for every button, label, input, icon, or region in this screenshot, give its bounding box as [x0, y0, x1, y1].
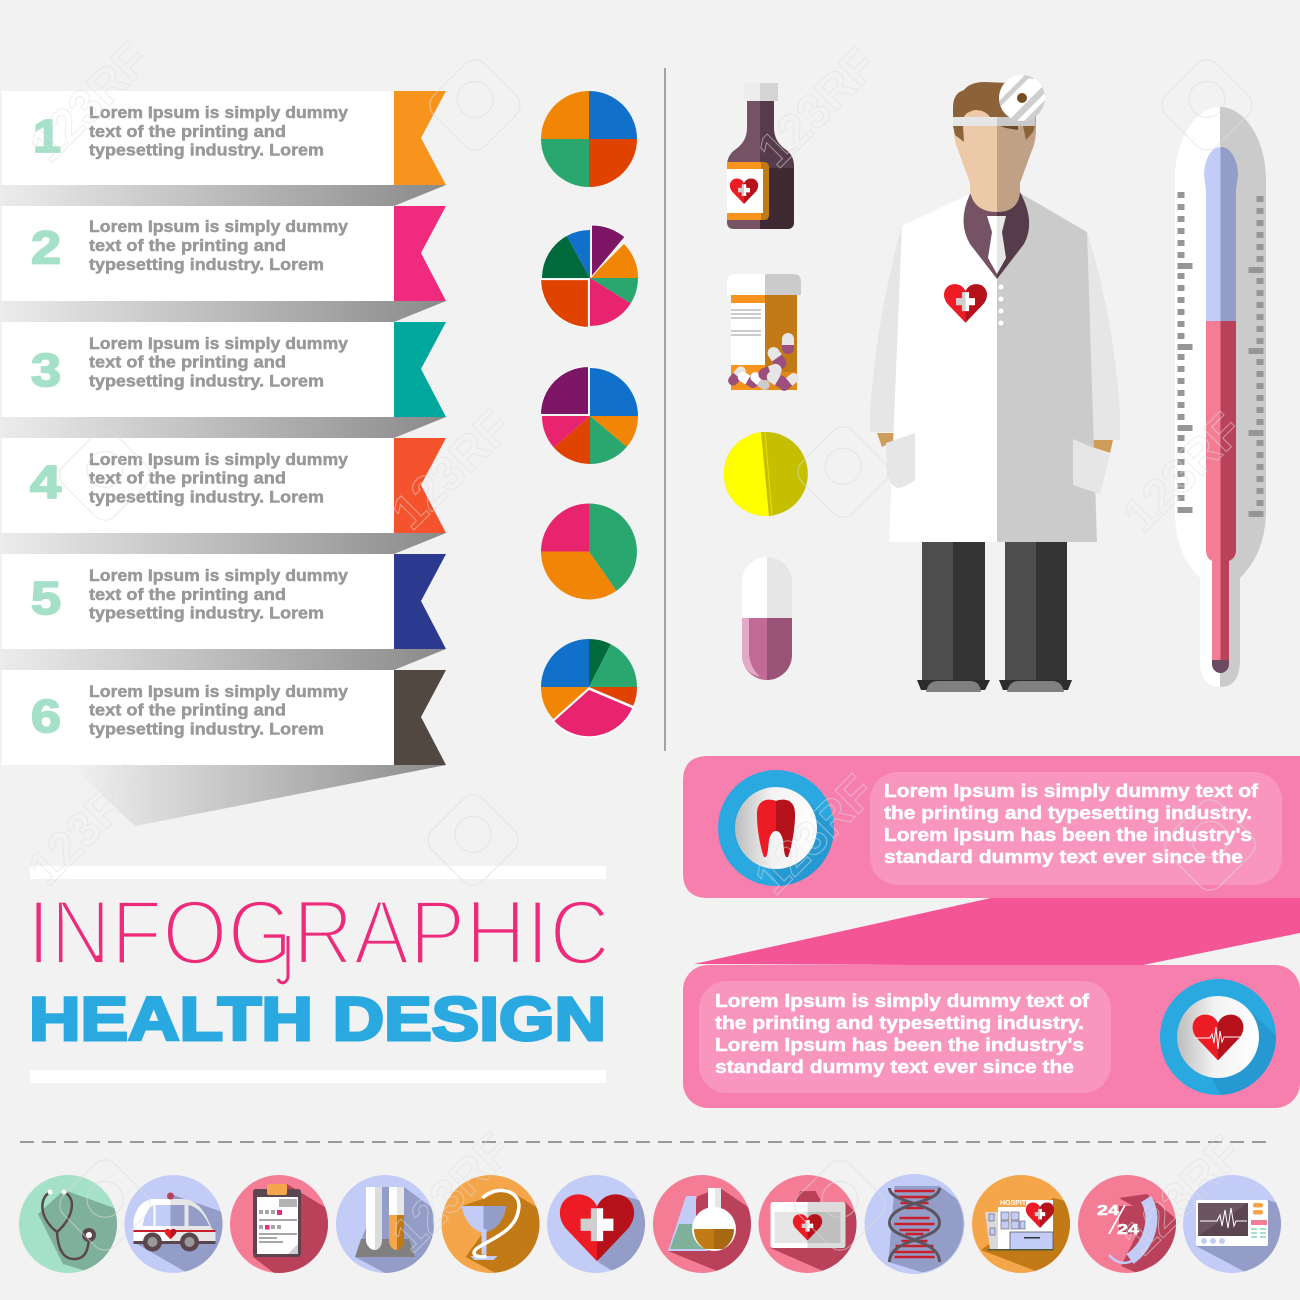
icon: heart monitor — [1183, 1175, 1281, 1273]
callout: tooth: standard dummy text ever since the — [884, 846, 1243, 867]
doctor pockets — [886, 433, 1110, 494]
list row 1 — [0, 91, 446, 206]
infographic canvas: 123RF — [18, 756, 158, 896]
pie chart 4 — [541, 504, 637, 599]
icon: 24/24 phone — [1078, 1175, 1176, 1273]
icon: hospital: HOSPITAL — [1000, 1200, 1036, 1207]
coat buttons — [998, 284, 1004, 326]
icon: hospital — [972, 1175, 1070, 1273]
divider line — [664, 68, 666, 751]
doctor legs and shoes — [917, 542, 1072, 692]
doctor head — [953, 82, 1036, 212]
icon: tooth disc — [718, 770, 834, 886]
list row 2: text of the printing and — [89, 236, 286, 255]
list row 4: typesetting industry. Lorem — [89, 488, 324, 506]
callout: heart: standard dummy text ever since the — [715, 1056, 1074, 1077]
icon: ambulance — [124, 1175, 222, 1273]
pie chart 1 — [541, 91, 637, 187]
list row 3 — [0, 322, 446, 438]
doctor coat — [889, 193, 1097, 542]
list row 4: 4 — [30, 456, 61, 508]
title block — [27, 866, 610, 1083]
icon: capsule — [742, 557, 792, 680]
callout: heart: Lorem Ipsum is simply dummy text of — [715, 990, 1090, 1011]
infographic canvas: 123RF — [382, 1123, 522, 1263]
callout: tooth: Lorem Ipsum is simply dummy text of — [884, 780, 1259, 801]
doctor sleeves — [870, 226, 1120, 453]
icon: clipboard — [230, 1175, 328, 1273]
right temperature scale — [1248, 196, 1264, 517]
icon: pharmacy bowl and snake — [442, 1175, 540, 1273]
infographic canvas: 123RF — [382, 400, 522, 540]
callout: heart — [683, 965, 1300, 1108]
list row 2: Lorem Ipsum is simply dummy — [89, 217, 349, 236]
list row 3: Lorem Ipsum is simply dummy — [89, 334, 349, 353]
title letter G tail — [278, 936, 288, 983]
dashed separator — [20, 1141, 1270, 1143]
list row 6: Lorem Ipsum is simply dummy — [89, 682, 349, 701]
infographic canvas: 123RF — [745, 765, 885, 905]
infographic canvas: 123RF — [1113, 1126, 1253, 1266]
list row 2: 2 — [31, 222, 61, 274]
list row 6: typesetting industry. Lorem — [89, 720, 324, 738]
list row 1: 1 — [33, 110, 61, 162]
icon: pill bottle — [726, 274, 801, 393]
title bottom bar — [30, 1070, 606, 1083]
callout: heart: the printing and typesetting industry. — [715, 1012, 1084, 1033]
icon: 24/24 phone: 24 — [1117, 1221, 1140, 1238]
list row 5: Lorem Ipsum is simply dummy — [89, 566, 349, 585]
list row 3: text of the printing and — [89, 352, 286, 372]
infographic canvas: 123RF — [748, 38, 888, 178]
list row 5: typesetting industry. Lorem — [89, 604, 324, 622]
panel: pink callouts — [683, 756, 1300, 1108]
list row 5: 5 — [31, 572, 61, 624]
list row 6: text of the printing and — [89, 700, 286, 720]
list row 4 — [0, 438, 446, 554]
title top bar — [30, 866, 606, 879]
list row 4: text of the printing and — [89, 468, 286, 488]
icon row — [19, 1174, 1281, 1274]
list row 2 — [0, 206, 446, 322]
icon: coat heart badge — [944, 284, 987, 323]
pie chart 5 — [541, 639, 637, 737]
icon: stethoscope — [19, 1175, 117, 1273]
icon: heart with cross — [547, 1175, 645, 1273]
icon: thermometer — [1175, 107, 1266, 687]
callout: tooth — [683, 756, 1300, 898]
icon: DNA helix — [864, 1174, 964, 1274]
callout: heart: Lorem Ipsum has been the industry's — [715, 1034, 1084, 1055]
list row 4: Lorem Ipsum is simply dummy — [89, 450, 349, 469]
icon: head mirror — [999, 75, 1045, 121]
icon: first aid kit — [758, 1175, 856, 1273]
icon: yellow tablet — [724, 432, 808, 516]
list row 1: text of the printing and — [89, 122, 286, 141]
list row 5: text of the printing and — [89, 585, 286, 604]
callout: tooth: the printing and typesetting industry. — [884, 802, 1252, 823]
infographic canvas: 123RF — [20, 33, 160, 173]
list row 3: typesetting industry. Lorem — [89, 372, 324, 390]
list row 1: typesetting industry. Lorem — [89, 140, 324, 160]
icon: test tubes — [336, 1175, 434, 1273]
title: infographic: INFOGRAPHIC — [27, 882, 610, 984]
left temperature scale — [1178, 192, 1192, 513]
list row 5 — [0, 554, 446, 670]
subtitle: health design: HEALTH DESIGN — [29, 985, 606, 1053]
list row 2: typesetting industry. Lorem — [89, 255, 324, 274]
doctor collar and tie — [964, 192, 1029, 279]
pie chart 3 — [540, 366, 638, 464]
list row 6: 6 — [31, 690, 61, 742]
infographic canvas: 123RF — [1113, 403, 1253, 543]
icon: 24/24 phone: 24 — [1097, 1202, 1120, 1219]
icon: flasks — [653, 1175, 751, 1273]
icon: heart disc — [1160, 979, 1276, 1095]
callout ribbon — [694, 898, 1300, 966]
list row 6 — [2, 670, 446, 826]
icon: syrup bottle — [727, 83, 794, 229]
pie chart 2 — [540, 225, 638, 328]
list row 3: 3 — [31, 344, 61, 396]
callout: tooth: Lorem Ipsum has been the industry's — [884, 824, 1252, 845]
illustration: doctor — [870, 75, 1120, 692]
list row 1: Lorem Ipsum is simply dummy — [89, 103, 349, 122]
